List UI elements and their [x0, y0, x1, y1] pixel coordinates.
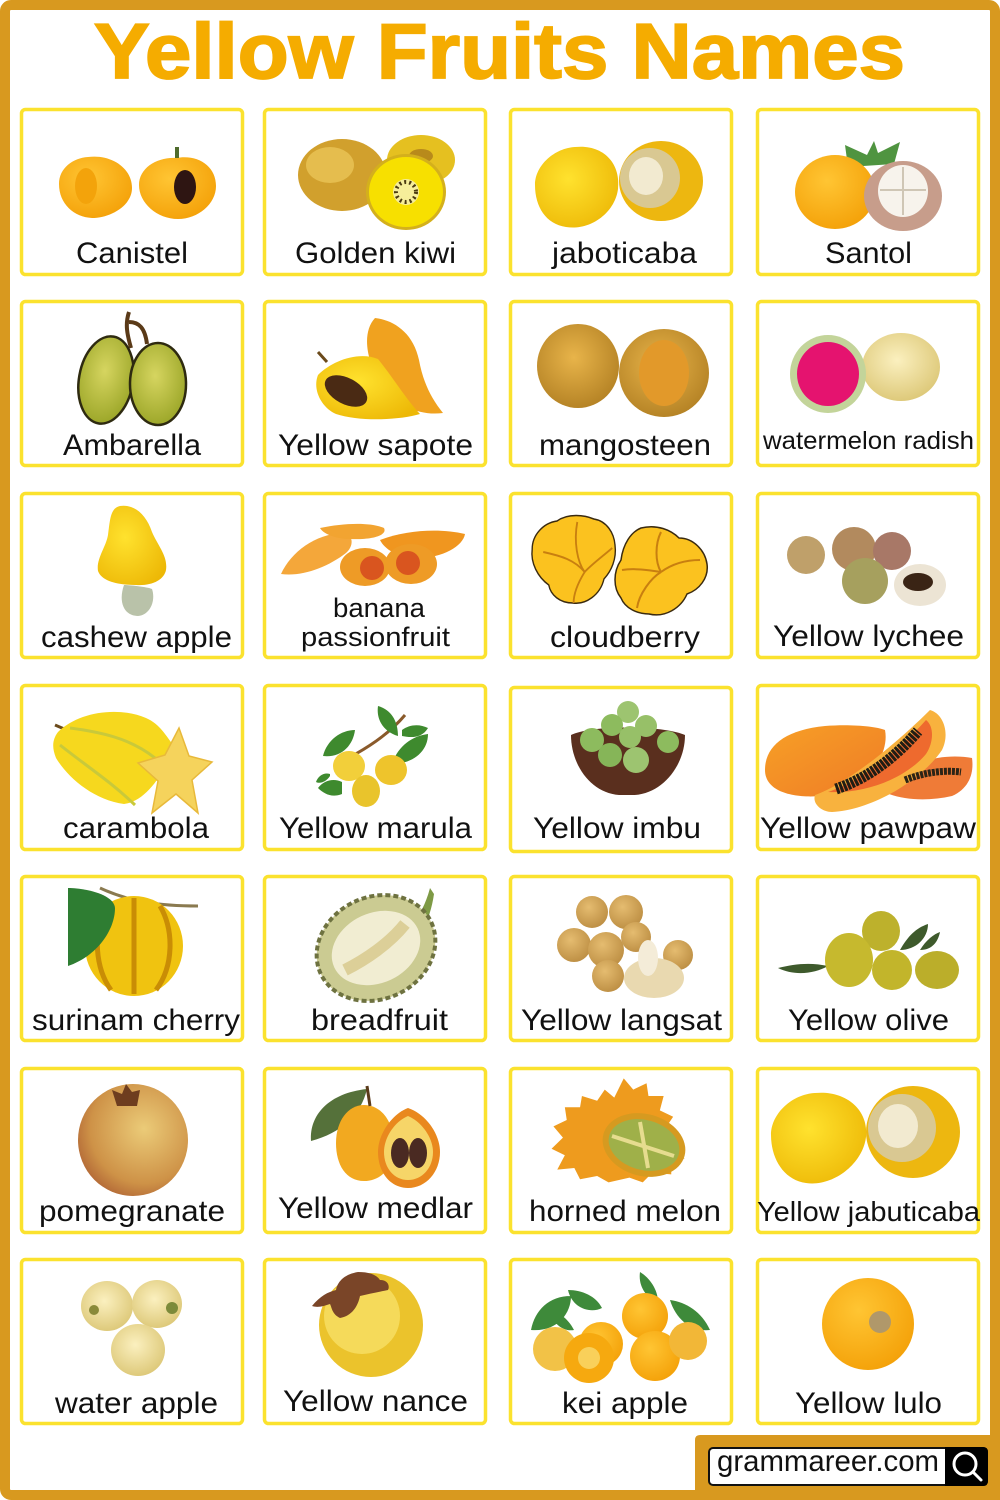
card: Yellow sapote	[264, 302, 486, 466]
card: Yellow imbu	[510, 688, 732, 852]
icon: water apple	[81, 1280, 182, 1376]
card: banana passionfruit	[264, 494, 486, 658]
label line 2: passionfruit	[301, 622, 451, 652]
card: Yellow nance	[264, 1260, 486, 1424]
label: watermelon radish	[762, 427, 974, 455]
label: mangosteen	[539, 429, 711, 462]
label: Santol	[825, 237, 912, 270]
card: pomegranate	[22, 1068, 242, 1232]
footer tab	[695, 1435, 1000, 1500]
card: Yellow medlar	[264, 1068, 486, 1232]
label: Yellow sapote	[278, 429, 473, 462]
title: Yellow Fruits Names	[94, 7, 905, 95]
card: water apple	[22, 1260, 242, 1424]
label: Canistel	[76, 237, 188, 270]
search box	[709, 1445, 988, 1486]
label: cashew apple	[41, 621, 232, 654]
icon: kei apple	[531, 1272, 710, 1383]
label: Yellow langsat	[521, 1004, 723, 1037]
icon: canistel fruit	[59, 147, 216, 219]
icon: yellow lulo	[822, 1278, 914, 1370]
label: Yellow imbu	[533, 812, 701, 845]
card: cashew apple	[22, 494, 242, 658]
card: breadfruit	[264, 876, 486, 1040]
icon: yellow pawpaw	[765, 710, 972, 812]
card: Ambarella	[22, 302, 242, 466]
icon: yellow olive	[778, 911, 959, 990]
card: horned melon	[510, 1068, 732, 1232]
icon: jaboticaba	[535, 141, 703, 228]
label: Yellow medlar	[278, 1192, 473, 1225]
icon: yellow jabuticaba	[771, 1086, 960, 1183]
website url: grammareer.com	[717, 1445, 939, 1478]
card: cloudberry	[510, 494, 732, 658]
card: surinam cherry	[22, 876, 242, 1040]
icon: ambarella	[72, 312, 186, 428]
card: Golden kiwi	[264, 110, 486, 274]
label: Yellow nance	[283, 1385, 468, 1418]
icon: golden kiwi	[298, 135, 455, 230]
label: Yellow lulo	[795, 1387, 942, 1420]
icon: yellow langsat	[557, 895, 693, 998]
icon: yellow medlar	[311, 1086, 440, 1188]
card: jaboticaba	[510, 110, 732, 274]
card: Santol	[758, 110, 978, 274]
card: Yellow lulo	[758, 1260, 978, 1424]
icon: watermelon radish	[790, 333, 940, 413]
label: kei apple	[562, 1387, 688, 1420]
card: kei apple	[510, 1260, 732, 1424]
card: Canistel	[22, 110, 242, 274]
card: Yellow langsat	[510, 876, 732, 1040]
label: carambola	[63, 812, 209, 845]
icon: yellow lychee	[787, 527, 946, 606]
icon: yellow sapote	[316, 318, 443, 419]
label: Yellow pawpaw	[760, 812, 976, 845]
icon: surinam cherry	[68, 888, 198, 996]
icon: magnifier	[954, 1453, 981, 1480]
icon: yellow imbu	[571, 701, 685, 795]
label: surinam cherry	[32, 1004, 240, 1037]
card: Yellow olive	[758, 876, 978, 1040]
icon: santol	[795, 141, 942, 231]
label: Yellow olive	[788, 1004, 949, 1037]
label: Yellow lychee	[773, 620, 964, 653]
icon: mangosteen	[537, 324, 709, 417]
icon: pomegranate	[78, 1084, 188, 1196]
icon: banana passionfruit	[281, 524, 465, 586]
label: water apple	[54, 1387, 218, 1420]
icon: yellow nance	[312, 1272, 423, 1377]
icon: yellow marula	[316, 706, 428, 807]
icon: horned melon	[552, 1078, 693, 1186]
card: Yellow pawpaw	[758, 686, 978, 850]
icon: breadfruit	[299, 876, 453, 1020]
icon: cloudberry	[532, 516, 707, 615]
card: watermelon radish	[758, 302, 978, 466]
label: Ambarella	[63, 429, 201, 462]
label: cloudberry	[550, 621, 700, 654]
label: Golden kiwi	[295, 237, 456, 270]
label: Yellow jabuticaba	[757, 1196, 980, 1227]
card: mangosteen	[510, 302, 732, 466]
label: jaboticaba	[551, 237, 697, 270]
icon: cashew apple	[98, 506, 166, 616]
card: Yellow jabuticaba	[757, 1068, 980, 1232]
label: breadfruit	[311, 1004, 449, 1037]
icon: carambola	[53, 712, 212, 813]
label: banana	[333, 593, 426, 623]
label: Yellow marula	[279, 812, 472, 845]
card: Yellow lychee	[758, 494, 978, 658]
card: Yellow marula	[264, 686, 486, 850]
card: carambola	[22, 686, 242, 850]
label: horned melon	[529, 1195, 721, 1228]
label: pomegranate	[39, 1195, 225, 1228]
